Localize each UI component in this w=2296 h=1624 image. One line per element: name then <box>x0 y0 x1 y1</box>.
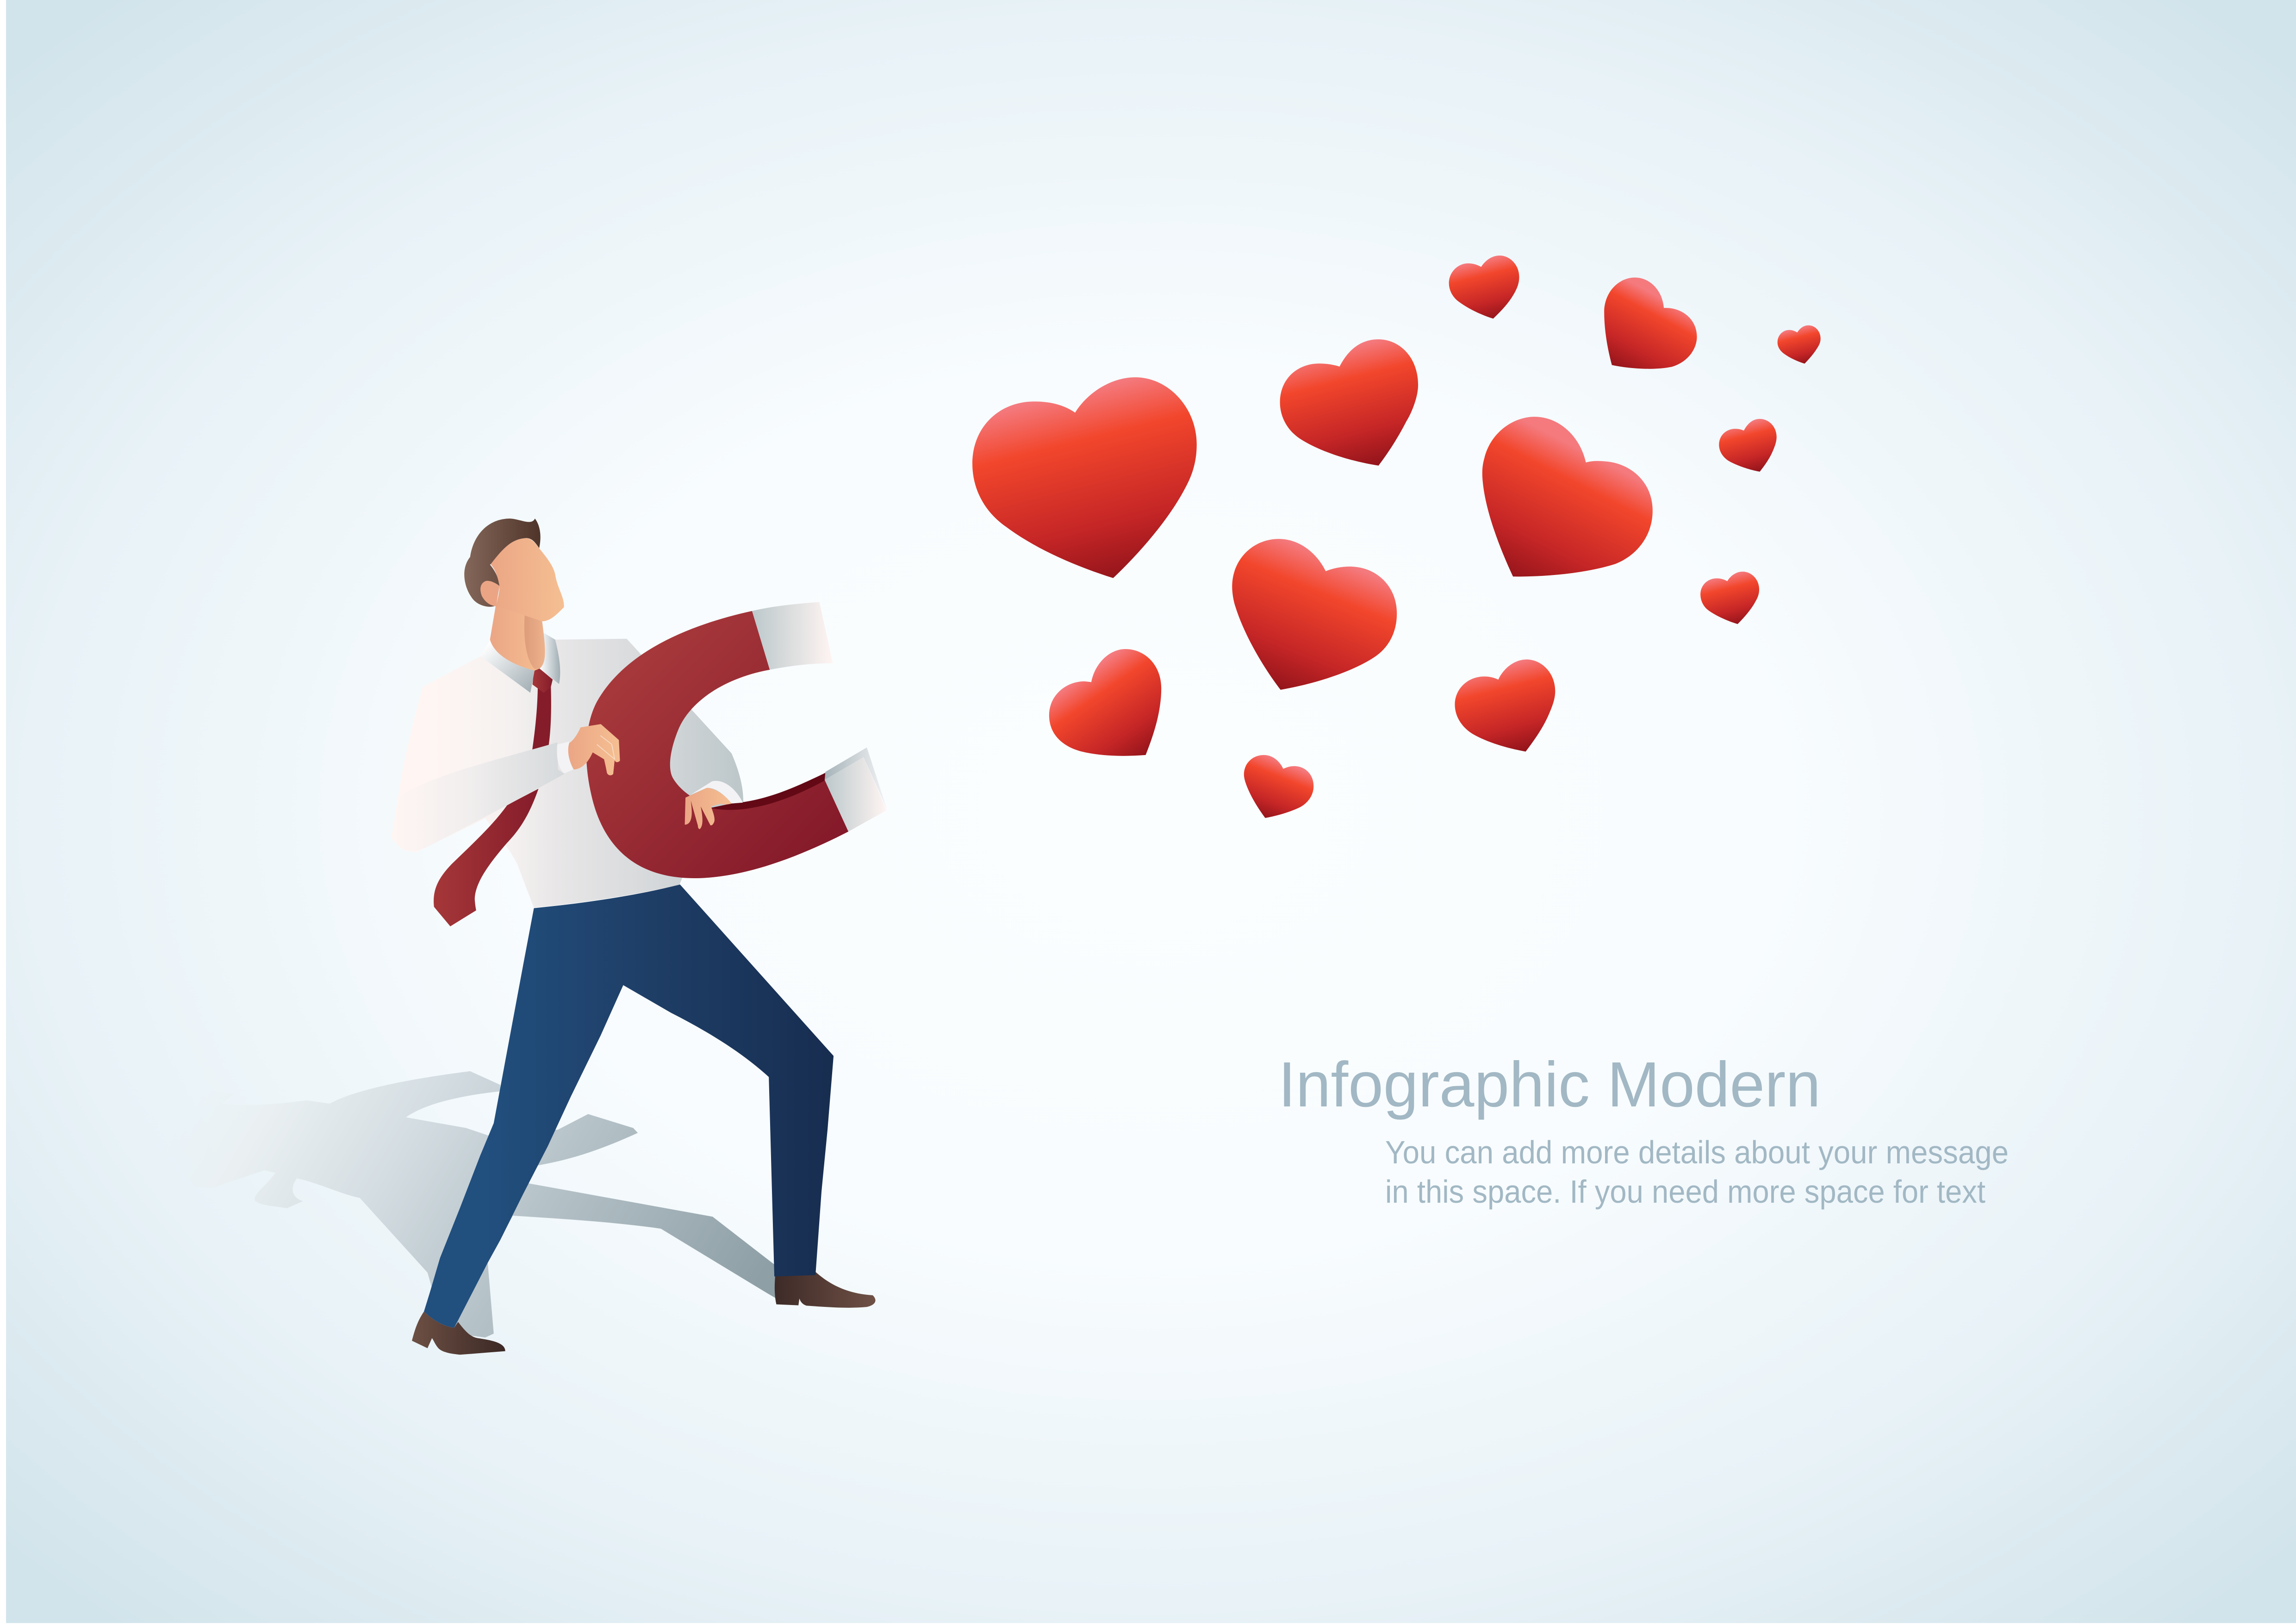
collar right <box>540 632 560 684</box>
shoe: front right <box>775 1272 875 1308</box>
neck <box>490 604 544 671</box>
face <box>491 538 564 621</box>
lower hand <box>685 788 732 829</box>
magnet body <box>586 611 848 878</box>
heart tilted top <box>1604 277 1697 369</box>
businessman legs <box>412 885 875 1355</box>
body text line 1: You can add more details about your message <box>1385 1134 2009 1170</box>
trousers <box>424 885 834 1328</box>
heart large tilted <box>1482 417 1653 576</box>
title: Infographic Modern <box>1278 1049 1821 1120</box>
body text line 2: in this space. If you need more space for text <box>1385 1174 1985 1210</box>
hearts: left cluster <box>972 339 1418 818</box>
magnet lower tip <box>825 757 887 831</box>
shirt <box>392 639 743 908</box>
sleeve arm <box>391 743 564 851</box>
heart centre <box>1232 539 1397 690</box>
hand on magnet <box>568 724 620 775</box>
hearts: right cluster <box>1449 256 1821 751</box>
heart small lower right <box>1700 572 1759 624</box>
magnet inner shadow <box>710 773 826 810</box>
lower cuff <box>691 781 743 804</box>
cuff <box>557 742 573 774</box>
tie knot and blade upper <box>532 668 553 751</box>
tie lower blade <box>434 789 539 926</box>
text block <box>1278 1049 2009 1210</box>
magnet lower tip side <box>825 747 887 810</box>
heart lower left <box>1049 649 1161 756</box>
heart tiny far right <box>1778 325 1821 363</box>
heart top <box>1449 256 1519 319</box>
neck shadow <box>524 615 545 669</box>
heart lower <box>1455 659 1555 751</box>
collar left <box>480 640 535 693</box>
heart upper right <box>1280 339 1418 466</box>
heart small right <box>1719 419 1777 472</box>
businessman upper body with magnet <box>391 518 887 926</box>
shoe: rear left <box>412 1312 505 1355</box>
ear <box>480 581 499 606</box>
heart large <box>972 377 1197 578</box>
magnet upper tip <box>752 602 833 670</box>
hair <box>464 518 541 607</box>
heart small bottom <box>1244 755 1313 818</box>
figure shadow <box>139 1071 776 1337</box>
